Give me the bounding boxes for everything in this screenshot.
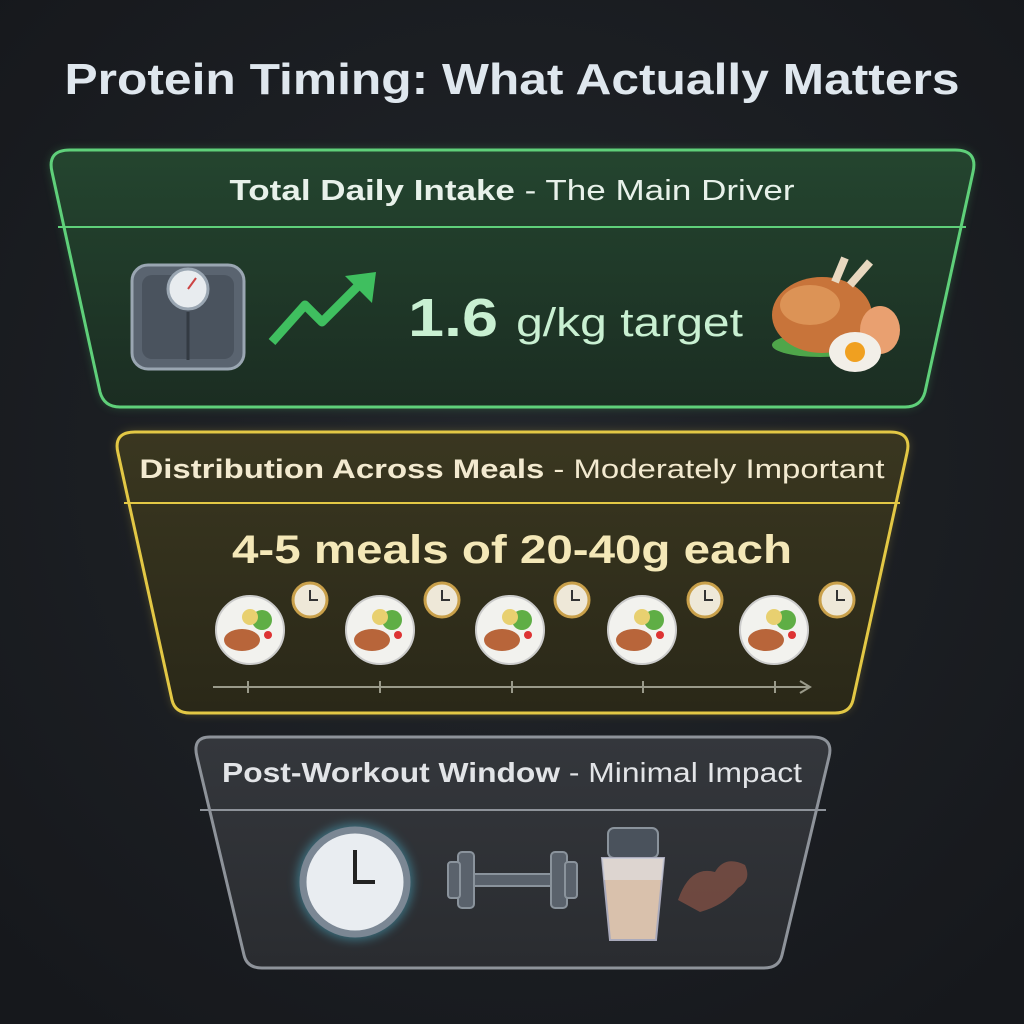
icon: muscle arm [678, 861, 747, 912]
icon: chicken and egg [772, 258, 900, 372]
meal plates and clocks [216, 583, 854, 664]
panel: post-workout window [196, 737, 830, 968]
panel: total daily intake [51, 150, 974, 407]
heading: total daily intake: Total Daily Intake - The Main Driver [230, 175, 795, 207]
heading: distribution: Distribution Across Meals - Moderately Important [140, 454, 885, 484]
text: meals: 4-5 meals of 20-40g each [232, 528, 792, 572]
title: Protein Timing: What Actually Matters [64, 55, 960, 104]
timeline arrow [213, 681, 810, 693]
text: 1.6 g/kg target: 1.6 g/kg target [408, 288, 743, 348]
heading: post-workout: Post-Workout Window - Minimal Impact [222, 757, 802, 788]
icon: scale [132, 265, 244, 369]
icon: trending arrow [272, 272, 376, 342]
icon: dumbbell [448, 852, 577, 908]
panel: distribution across meals [117, 432, 908, 713]
icon: clock [297, 824, 413, 940]
icon: shaker [602, 828, 664, 940]
